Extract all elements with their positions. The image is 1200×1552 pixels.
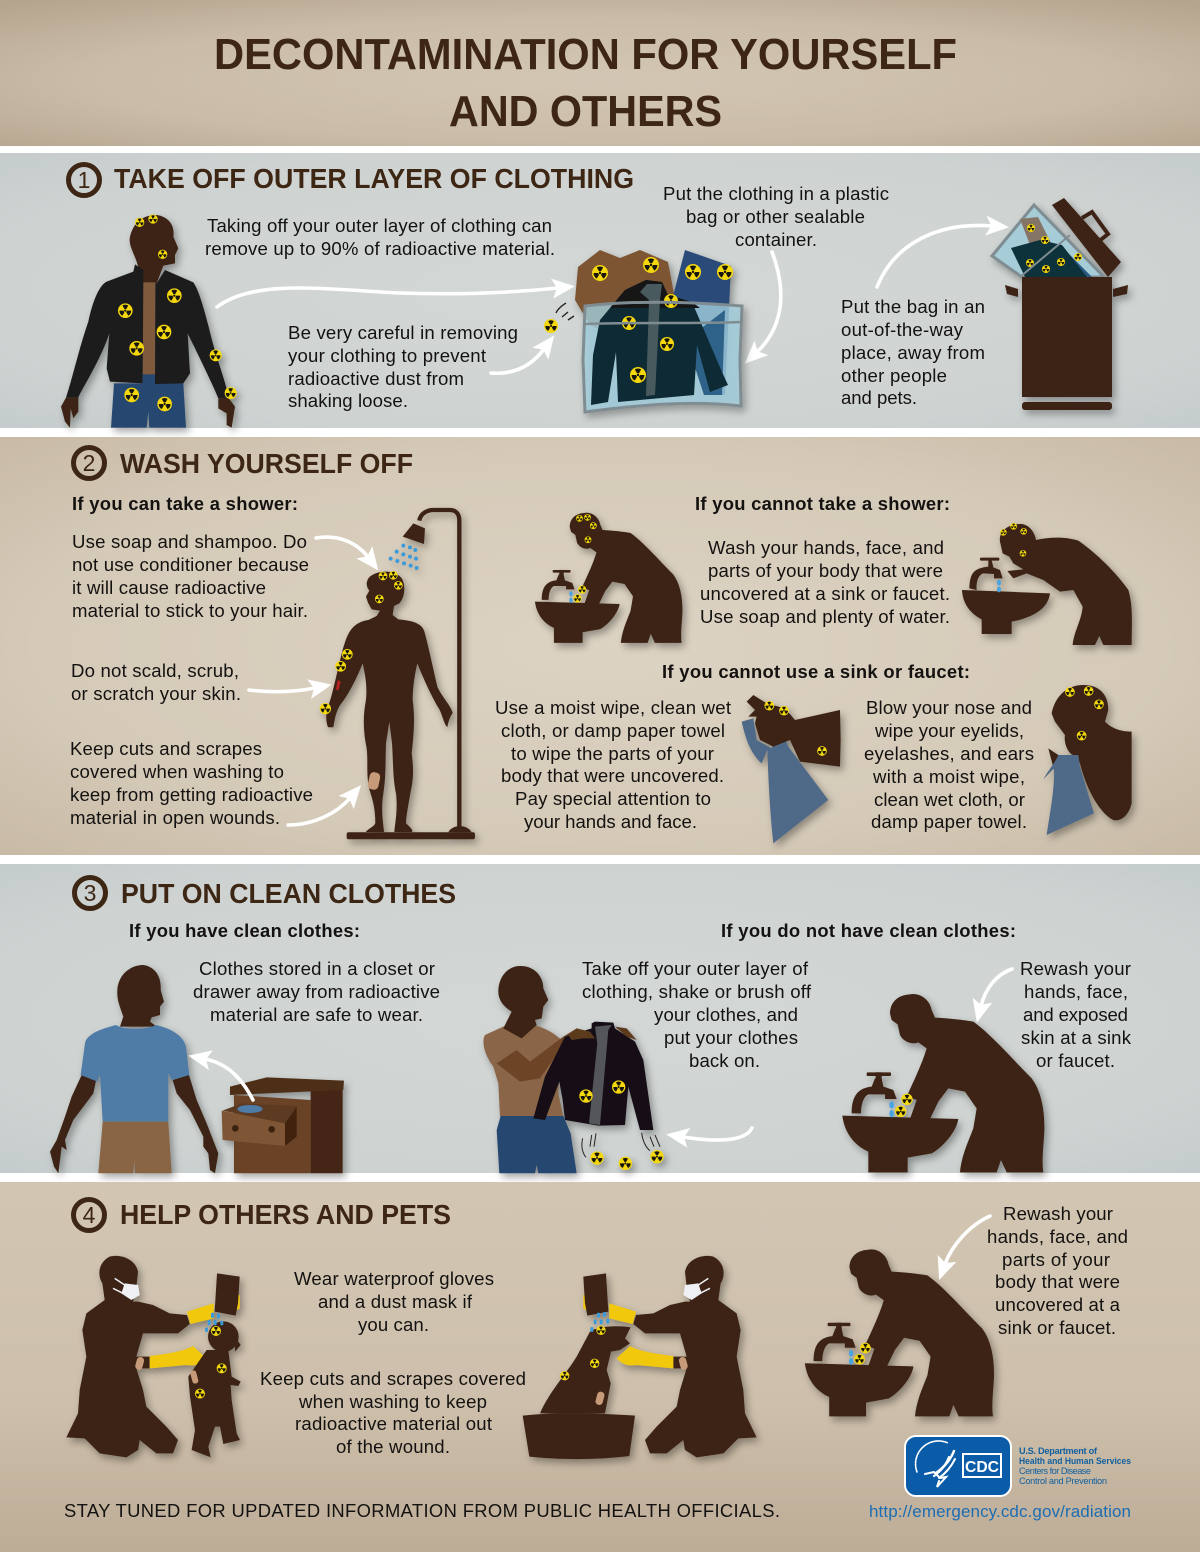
title: AND OTHERS — [449, 87, 722, 136]
text: outer layer 90 percent: remove up to 90% of radioactive material. — [205, 238, 555, 259]
subhead: cannot take shower: If you cannot take a shower: — [695, 493, 950, 514]
text: keep cuts covered: keep from getting radioactive — [70, 784, 313, 805]
text: blow your nose: eyelashes, and ears — [864, 743, 1034, 764]
text: shake or brush off: clothing, shake or brush off — [582, 981, 812, 1002]
text: blow your nose — [864, 697, 1034, 832]
text: moist wipe: Pay special attention to — [515, 788, 711, 809]
panel: step 2 wash yourself off — [0, 437, 1200, 855]
text: shake or brush off — [582, 958, 812, 1071]
agency text: Control and Prevention — [1019, 1476, 1107, 1486]
panel: step 1 take off outer layer — [0, 153, 1200, 428]
agency text: U.S. Department of — [1019, 1446, 1098, 1456]
text: stored clothes: drawer away from radioactive — [193, 981, 440, 1002]
text: do not scald — [71, 660, 241, 704]
text: gloves and mask: Wear waterproof gloves — [294, 1268, 494, 1289]
text: soap and shampoo: Use soap and shampoo. Do — [72, 531, 307, 552]
text: out of the way — [841, 296, 985, 408]
agency text — [1019, 1446, 1131, 1486]
panel: step 4 help others and pets — [0, 1182, 1200, 1552]
icon: man washing hands at sink — [535, 513, 682, 643]
text: rewash skin: Rewash your — [1020, 958, 1131, 979]
text: keep cuts covered: material in open wounds. — [70, 807, 280, 828]
text: wash hands face: Wash your hands, face, and — [708, 537, 944, 558]
text: rewash hands: sink or faucet. — [998, 1317, 1116, 1338]
text: out of the way: and pets. — [841, 387, 917, 408]
arrow: to shower head — [316, 537, 368, 557]
text: rewash hands: uncovered at a — [995, 1294, 1121, 1315]
text: blow your nose: damp paper towel. — [871, 811, 1027, 832]
text: moist wipe: body that were uncovered. — [501, 765, 724, 786]
subhead: no clean clothes: If you do not have clean clothes: — [721, 920, 1016, 941]
text: rewash skin — [1020, 958, 1132, 1071]
text: keep cuts covered — [70, 738, 313, 828]
text: rewash hands: Rewash your — [1003, 1203, 1113, 1224]
text: rewash hands: body that were — [995, 1271, 1120, 1292]
text: shake or brush off: back on. — [689, 1050, 760, 1071]
logo: HHS and CDC — [905, 1436, 1131, 1496]
arrow: to knee bandage — [288, 798, 350, 825]
step 3 heading: 3 — [84, 880, 96, 906]
agency text: Centers for Disease — [1019, 1466, 1091, 1476]
text: be very careful — [288, 322, 518, 411]
arrow: to pile — [217, 288, 558, 307]
text: wash hands face: Use soap and plenty of water. — [700, 606, 950, 627]
icon: loose radioactive particle — [544, 303, 574, 333]
icon: CDC mark — [962, 1453, 1002, 1478]
arrow: from drawer to man — [205, 1059, 253, 1100]
icon: person at sink — [805, 1249, 994, 1416]
icon: man at sink — [842, 994, 1044, 1172]
text: shake or brush off: Take off your outer layer of — [582, 958, 809, 979]
text: stored clothes: Clothes stored in a closet or — [199, 958, 435, 979]
text: keep cuts covered: Keep cuts and scrapes — [70, 738, 262, 759]
text: plastic bag: container. — [735, 229, 817, 250]
title: DECONTAMINATION FOR YOURSELF — [214, 30, 957, 79]
step 1 heading: 1 — [78, 167, 90, 193]
icon: CDC mark: CDC — [965, 1459, 999, 1476]
agency text: Health and Human Services — [1019, 1456, 1131, 1466]
text: keep cuts covered when washing — [260, 1368, 526, 1457]
icon: adult washing child — [66, 1256, 241, 1457]
text: moist wipe: your hands and face. — [524, 811, 697, 832]
text: wash hands face: uncovered at a sink or faucet. — [700, 583, 950, 604]
subhead: cannot use sink: If you cannot use a sink or faucet: — [662, 661, 970, 682]
header band — [0, 0, 1200, 146]
text: keep cuts covered when washing: of the wound. — [336, 1436, 450, 1457]
arrow: to bag — [757, 252, 781, 352]
icon: trash can with bag — [992, 198, 1128, 410]
text: stored clothes: material are safe to wear. — [210, 1004, 423, 1025]
step 3 heading: PUT ON CLEAN CLOTHES — [121, 878, 456, 909]
icon: nightstand with open drawer — [222, 1077, 344, 1173]
text: out of the way: place, away from — [841, 342, 985, 363]
text: wash hands face: parts of your body that were — [708, 560, 943, 581]
text: out of the way: other people — [841, 365, 947, 386]
text: keep cuts covered when washing: when washing to keep — [298, 1391, 487, 1412]
text: outer layer 90 percent: Taking off your outer layer of clothing can — [207, 215, 552, 236]
text: rewash hands: hands, face, and — [987, 1226, 1128, 1247]
text: blow your nose: clean wet cloth, or — [874, 789, 1025, 810]
text: gloves and mask: and a dust mask if — [318, 1291, 473, 1312]
text: shake or brush off: your clothes, and — [654, 1004, 798, 1025]
arrow: to loose dust — [491, 349, 544, 373]
subhead: shower: If you can take a shower: — [72, 493, 298, 514]
footer notice: STAY TUNED FOR UPDATED INFORMATION FROM PUBLIC HEALTH OFFICIALS. — [64, 1500, 780, 1521]
text: be very careful: shaking loose. — [288, 390, 408, 411]
icon: clothing in plastic bag — [575, 250, 742, 412]
text: gloves and mask — [294, 1268, 494, 1335]
step 2 heading: 2 — [83, 450, 95, 476]
icon: adult washing dog in tub — [523, 1256, 757, 1459]
text: soap and shampoo: not use conditioner because — [72, 554, 309, 575]
text: out of the way: out-of-the-way — [841, 319, 964, 340]
text: moist wipe — [495, 697, 732, 832]
text: moist wipe: cloth, or damp paper towel — [501, 720, 725, 741]
text: rewash skin: and exposed — [1023, 1004, 1128, 1025]
text: wash hands face — [700, 537, 950, 627]
text: blow your nose: wipe your eyelids, — [874, 720, 1024, 741]
text: be very careful: Be very careful in removing — [288, 322, 518, 343]
text: blow your nose: with a moist wipe, — [872, 766, 1025, 787]
text: keep cuts covered: covered when washing to — [70, 761, 284, 782]
step 2 heading: WASH YOURSELF OFF — [120, 448, 413, 479]
arrow: to person at sink — [945, 1216, 990, 1264]
text: plastic bag — [663, 183, 889, 250]
text: be very careful: your clothing to prevent — [288, 345, 487, 366]
arrow: to trash can — [877, 226, 992, 287]
text: do not scald: or scratch your skin. — [71, 683, 241, 704]
text: rewash hands — [987, 1203, 1128, 1338]
icon: man wearing contaminated jacket — [61, 214, 237, 428]
arrow: to man at sink — [981, 969, 1012, 1006]
text: keep cuts covered when washing: radioactive material out — [295, 1413, 493, 1434]
subhead: have clean clothes: If you have clean clothes: — [129, 920, 360, 941]
icon: person washing face at sink — [962, 523, 1132, 645]
icon: hands wiping with towel — [742, 695, 841, 843]
text: blow your nose: Blow your nose and — [866, 697, 1032, 718]
text: be very careful: radioactive dust from — [288, 368, 464, 389]
icon: person wiping face with towel — [1043, 685, 1132, 835]
text: out of the way: Put the bag in an — [841, 296, 985, 317]
text: stored clothes — [193, 958, 440, 1025]
text: outer layer 90 percent — [205, 215, 555, 259]
text: shake or brush off: put your clothes — [664, 1027, 798, 1048]
text: keep cuts covered when washing: Keep cuts and scrapes covered — [260, 1368, 526, 1389]
step 4 heading: 4 — [83, 1202, 96, 1228]
text: soap and shampoo — [72, 531, 309, 621]
text: rewash skin: skin at a sink — [1021, 1027, 1132, 1048]
arrow: to skin — [249, 688, 315, 692]
step 1 heading: TAKE OFF OUTER LAYER OF CLOTHING — [114, 163, 634, 194]
step 4 heading: HELP OTHERS AND PETS — [120, 1199, 451, 1230]
icon: child — [188, 1313, 241, 1457]
text: soap and shampoo: material to stick to your hair. — [72, 600, 308, 621]
url: http://emergency.cdc.gov/radiation — [869, 1502, 1131, 1521]
icon: shirtless man shaking jacket — [483, 966, 664, 1173]
text: gloves and mask: you can. — [358, 1314, 429, 1335]
text: soap and shampoo: it will cause radioactive — [72, 577, 266, 598]
arrow: to jacket — [683, 1128, 752, 1140]
panel: step 3 put on clean clothes — [0, 864, 1200, 1173]
title — [214, 30, 957, 136]
text: plastic bag: Put the clothing in a plastic — [663, 183, 889, 204]
icon: HHS eagle — [916, 1441, 955, 1487]
text: moist wipe: to wipe the parts of your — [511, 743, 714, 764]
icon: man in clean clothes — [50, 965, 218, 1173]
text: rewash skin: hands, face, — [1024, 981, 1128, 1002]
text: do not scald: Do not scald, scrub, — [71, 660, 239, 681]
text: plastic bag: bag or other sealable — [686, 206, 865, 227]
text: rewash hands: parts of your — [1002, 1249, 1110, 1270]
text: moist wipe: Use a moist wipe, clean wet — [495, 697, 732, 718]
text: rewash skin: or faucet. — [1036, 1050, 1115, 1071]
icon: shower and man — [320, 510, 475, 839]
